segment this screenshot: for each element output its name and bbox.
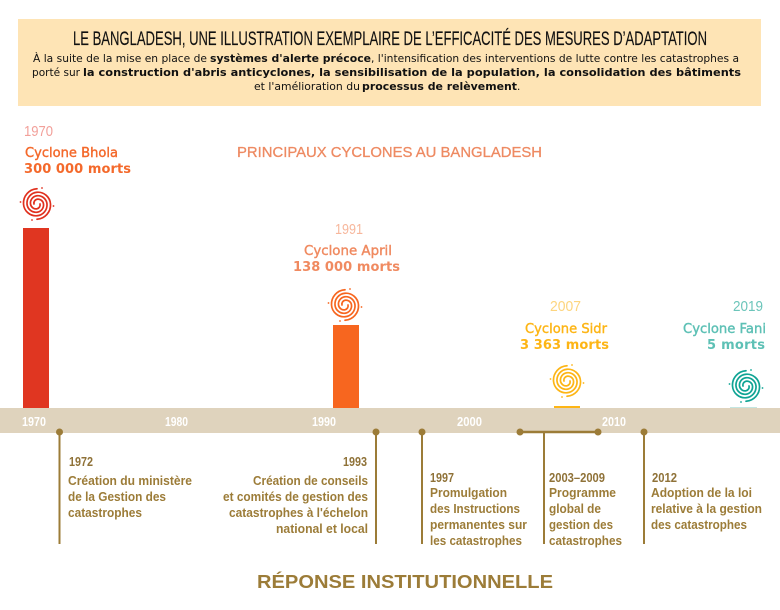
text block: introduction: et l'amélioration du <box>254 81 360 93</box>
milestone 2012: des catastrophes <box>651 517 747 532</box>
milestone 1997: 1997 <box>430 471 454 485</box>
cyclone Fani 2019: Cyclone Fani <box>683 322 766 337</box>
milestone 1972: 1972 <box>69 455 93 469</box>
milestone 1993 <box>223 428 380 544</box>
timeline band: 1990 <box>312 415 336 429</box>
cyclone Bhola 1970: 300 000 morts <box>24 162 131 177</box>
milestone 2003-2009: gestion des <box>549 517 613 532</box>
cyclone Fani 2019: 5 morts <box>707 338 765 353</box>
milestone 2012: Adoption de la loi <box>651 485 752 500</box>
cyclone Bhola 1970: Cyclone Bhola <box>25 146 118 161</box>
cyclone Sidr 2007: Cyclone Sidr <box>525 322 608 337</box>
timeline band: 1980 <box>165 415 188 429</box>
cyclone Bhola 1970 <box>20 123 131 408</box>
panel: header <box>18 19 761 106</box>
cyclone April 1991: 1991 <box>335 221 363 238</box>
cyclone Sidr 2007: 3 363 morts <box>520 338 609 353</box>
milestone 1993: et comités de gestion des <box>223 489 368 504</box>
milestone 1993: Création de conseils <box>253 473 368 488</box>
milestone 1997: les catastrophes <box>430 533 522 548</box>
text block: introduction <box>32 52 741 93</box>
text block: introduction: À la suite de la mise en place de <box>33 52 207 65</box>
cyclone Sidr 2007: 2007 <box>550 298 581 315</box>
milestone 2012: 2012 <box>652 471 677 485</box>
milestone 2003-2009 <box>516 428 622 548</box>
cyclone April 1991 <box>293 221 400 408</box>
milestone 1972 <box>56 428 192 544</box>
milestone 1997: Promulgation <box>430 485 507 500</box>
milestone 1997: permanentes sur <box>430 517 527 532</box>
milestone 2003-2009: 2003–2009 <box>549 471 605 485</box>
cyclone Sidr 2007 <box>520 298 609 408</box>
milestone 1972: catastrophes <box>68 505 142 520</box>
heading: principal cyclones: PRINCIPAUX CYCLONES AU BANGLADESH <box>237 144 542 161</box>
cyclone Bhola 1970: 1970 <box>24 123 53 140</box>
cyclone April 1991: Cyclone April <box>304 244 392 259</box>
icon: teal spiral <box>729 369 763 403</box>
icon: yellow spiral <box>550 364 584 398</box>
milestone 2012 <box>640 428 762 544</box>
milestone 1997 <box>418 428 527 548</box>
milestone 1993: 1993 <box>343 455 367 469</box>
milestone 1993: catastrophes à l'échelon <box>229 505 368 520</box>
icon: orange spiral <box>328 288 362 322</box>
milestone 1972: Création du ministère <box>68 473 192 488</box>
timeline band: 2000 <box>457 415 482 429</box>
bar: 5 deaths <box>730 407 757 408</box>
milestone 1997: des Instructions <box>430 501 520 516</box>
timeline band <box>0 408 780 433</box>
milestone 2003-2009: global de <box>549 501 601 516</box>
heading: institutional response: RÉPONSE INSTITUTIONNELLE <box>257 571 553 592</box>
text block: introduction: . <box>517 81 520 93</box>
cyclone Fani 2019: 2019 <box>733 298 763 315</box>
text block: introduction: porté sur <box>32 67 81 79</box>
bar: 138 000 deaths <box>333 325 359 408</box>
timeline band: 2010 <box>602 415 626 429</box>
bar: 300 000 deaths <box>23 228 49 408</box>
icon: red spiral <box>20 187 54 221</box>
milestone 2003-2009: Programme <box>549 485 616 500</box>
timeline band: 1970 <box>22 415 46 429</box>
text block: introduction: systèmes d'alerte précoce <box>210 53 371 65</box>
milestone 1972: de la Gestion des <box>68 489 166 504</box>
bar: 3 363 deaths <box>554 406 580 408</box>
text block: introduction: processus de relèvement <box>362 81 517 93</box>
cyclone Fani 2019 <box>683 298 766 408</box>
milestone 2003-2009: catastrophes <box>549 533 622 548</box>
milestone 2012: relative à la gestion <box>651 501 762 516</box>
cyclone April 1991: 138 000 morts <box>293 260 400 275</box>
text block: introduction: , l'intensification des interventions de lutte contre les catastrophes a <box>371 53 739 65</box>
milestone 1993: national et local <box>276 521 368 536</box>
text block: introduction: la construction d'abris anticyclones, la sensibilisation de la population, la consolidation des bâtiments <box>83 67 741 79</box>
